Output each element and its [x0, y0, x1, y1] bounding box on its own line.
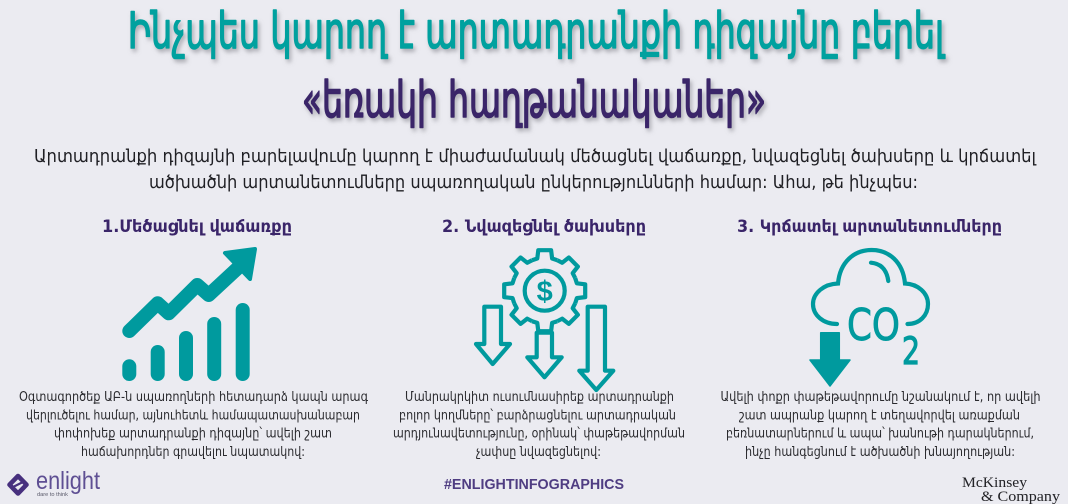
title line 2: «եռակի հաղթանականեր» — [302, 71, 766, 129]
body text 2: չափսը նվազեցնելով: — [476, 444, 601, 460]
panel: cut emissions — [720, 217, 1040, 460]
heading 2: 2. Նվազեցնել ծախսերը — [442, 217, 646, 237]
body text 2: արդյունավետությունը, օրինակ՝ փաթեթավորման — [393, 426, 685, 442]
body text 2: բոլոր կողմները՝ բարձրացնելու արտադրական — [399, 408, 676, 424]
logo: McKinsey & Company — [962, 475, 1061, 504]
intro text — [34, 146, 1037, 193]
title — [128, 2, 945, 129]
body text 1: փոփոխեք արտադրանքի դիզայնը՝ ավելի շատ — [54, 426, 332, 442]
icon: CO2 cloud with down arrow — [810, 250, 928, 386]
body text 2: Մանրակրկիտ ուսումնասիրեք արտադրանքի — [405, 389, 674, 405]
icon: CO2 cloud with down arrow: CO — [847, 300, 900, 351]
body text 2 — [393, 389, 685, 460]
heading 1: 1.Մեծացնել վաճառքը — [102, 217, 292, 237]
body text 3: ինչը հանգեցնում է ածխածնի խնայողության: — [745, 444, 1015, 460]
body text 3: շատ ապրանք կարող է տեղավորվել առաքման — [739, 408, 1020, 424]
hashtag: #ENLIGHTINFOGRAPHICS — [444, 476, 624, 493]
logo: enlight: enlight — [36, 467, 100, 495]
icon: CO2 cloud with down arrow: 2 — [902, 330, 920, 373]
logo: enlight: dare to think — [37, 492, 68, 498]
icon: rising bar chart with arrow — [122, 249, 255, 381]
body text 3 — [720, 389, 1040, 460]
body text 1: Օգտագործեք ԱԲ-ն սպառողների հետադարձ կապն արագ — [19, 389, 368, 405]
intro text: ածխածնի արտանետումները սպառողական ընկերությունների համար: Ահա, թե ինչպես: — [149, 172, 918, 193]
panel: reduce costs — [393, 217, 685, 460]
logo: enlight — [10, 467, 100, 498]
body text 1 — [19, 389, 368, 460]
body text 1: հաճախորդներ գրավելու նպատակով: — [81, 444, 305, 460]
logo: McKinsey & Company: McKinsey — [962, 475, 1028, 491]
heading 3: 3. Կրճատել արտանետումները — [737, 217, 1002, 237]
body text 1: վերլուծելու համար, այնուհետև համապատասխանաբար — [26, 408, 360, 424]
icon: gear with dollar and down arrows: $ — [537, 276, 553, 308]
panel: increase sales — [19, 217, 368, 460]
icon: gear with dollar and down arrows — [476, 250, 613, 390]
